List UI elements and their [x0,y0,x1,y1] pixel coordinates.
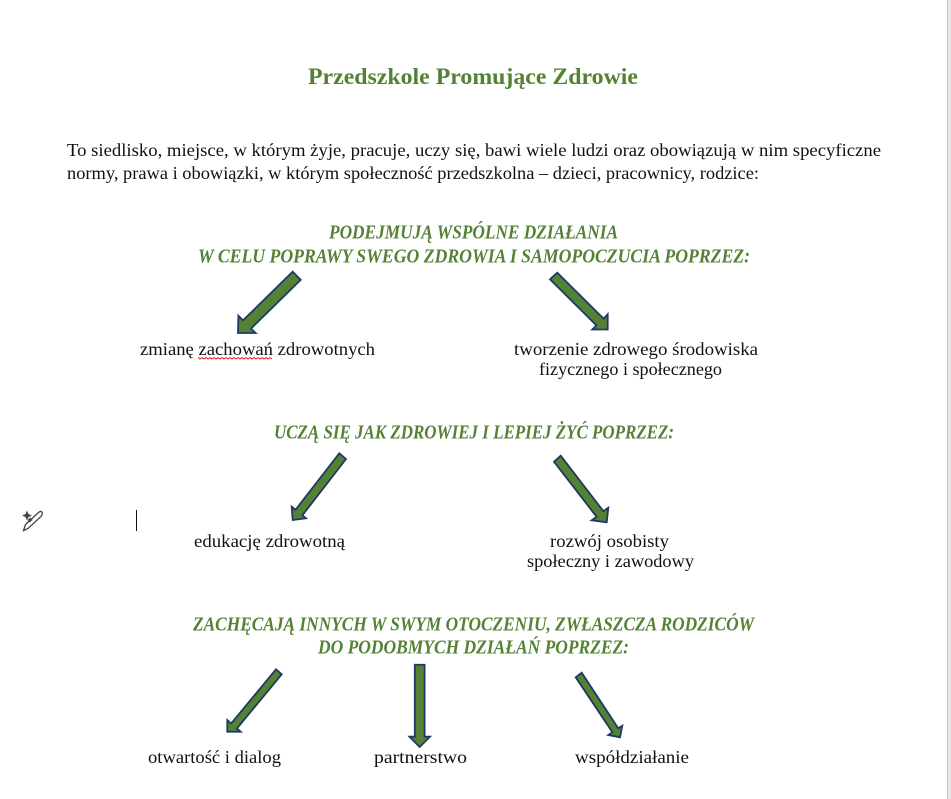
arrow: section 3 center [409,665,430,747]
heading: section 3: ZACHĘCAJĄ INNYCH W SWYM OTOCZENIU, ZWŁASZCZA RODZICÓW [192,614,755,636]
label: partnerstwo: partnerstwo [374,747,467,767]
heading: section 1 [198,222,750,268]
label: współdziałanie: współdziałanie [575,747,689,767]
label: rozwój osobisty: społeczny i zawodowy [527,551,694,571]
title: Przedszkole Promujące Zdrowie [308,64,638,89]
label: zmianę zachowań zdrowotnych: zmianę zachowań zdrowotnych [140,339,375,359]
heading: section 3 [192,614,755,658]
text caret [136,510,137,531]
label: rozwój osobisty: rozwój osobisty [550,531,669,551]
label: tworzenie zdrowego środowiska: tworzenie zdrowego środowiska [514,339,758,359]
label: tworzenie zdrowego środowiska: fizycznego i społecznego [539,359,722,379]
arrow: section 2 left [292,453,346,520]
icon: sparkle pen [22,510,42,530]
heading: section 3: DO PODOBMYCH DZIAŁAŃ POPRZEZ: [317,636,629,658]
intro text [67,140,881,183]
heading: section 1: W CELU POPRAWY SWEGO ZDROWIA I SAMOPOCZUCIA POPRZEZ: [198,246,750,268]
arrow: section 1 right [550,273,608,330]
label: tworzenie zdrowego środowiska [514,339,758,379]
label: edukację zdrowotną: edukację zdrowotną [194,531,345,551]
spelling squiggle [198,358,272,359]
arrow: section 3 left [227,669,282,732]
heading: section 2: UCZĄ SIĘ JAK ZDROWIEJ I LEPIEJ ŻYĆ POPRZEZ: [274,422,674,444]
arrow: section 1 left [238,272,301,333]
intro text: normy, prawa i obowiązki, w którym społeczność przedszkolna – dzieci, pracownicy, rodzice: [67,163,759,183]
label: otwartość i dialog: otwartość i dialog [148,747,281,767]
arrow: section 2 right [554,456,608,522]
label: rozwój osobisty [527,531,694,571]
intro text: To siedlisko, miejsce, w którym żyje, pracuje, uczy się, bawi wiele ludzi oraz obowiązują w nim specyficzne [67,140,881,160]
arrow: section 3 right [576,673,622,737]
heading: section 1: PODEJMUJĄ WSPÓLNE DZIAŁANIA [328,222,618,244]
